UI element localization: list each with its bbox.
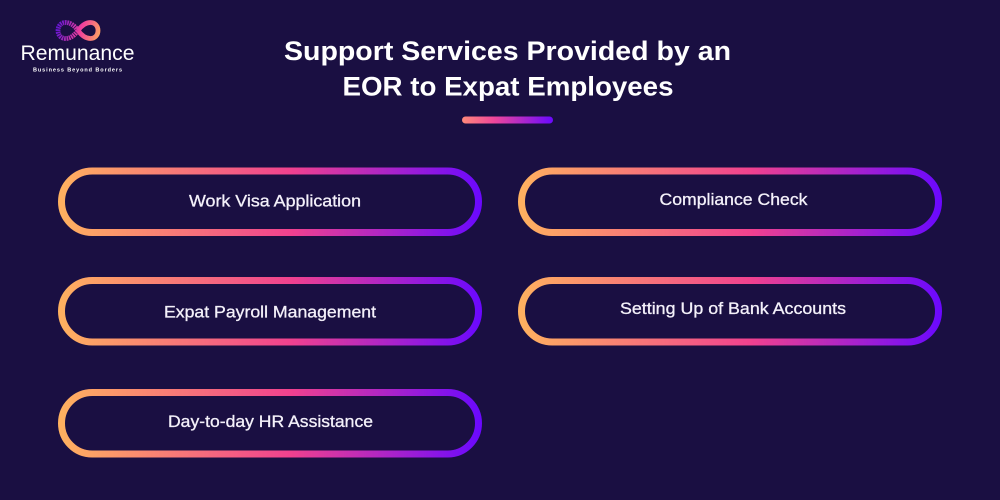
pill: Work Visa Application: Work Visa Application	[189, 192, 361, 210]
pill: Setting Up of Bank Accounts	[522, 280, 938, 342]
wordmark: Remunance	[20, 41, 134, 65]
pill: Setting Up of Bank Accounts: Setting Up of Bank Accounts	[620, 299, 846, 318]
pill: Day-to-day HR Assistance: Day-to-day HR Assistance	[168, 412, 373, 431]
pill: Compliance Check: Compliance Check	[660, 190, 808, 209]
logo	[20, 22, 134, 74]
title accent bar	[462, 116, 553, 124]
title: EOR to Expat Employees	[342, 72, 674, 102]
tagline: Business Beyond Borders	[33, 68, 122, 74]
pill: Expat Payroll Management	[62, 280, 478, 342]
title	[284, 36, 731, 102]
pill: Work Visa Application	[62, 171, 478, 232]
icon: infinity loop	[58, 22, 98, 38]
pill: Day-to-day HR Assistance	[62, 392, 478, 454]
title: Support Services Provided by an	[284, 36, 731, 66]
pill: Expat Payroll Management: Expat Payroll Management	[164, 302, 376, 322]
pill: Compliance Check	[522, 171, 938, 232]
